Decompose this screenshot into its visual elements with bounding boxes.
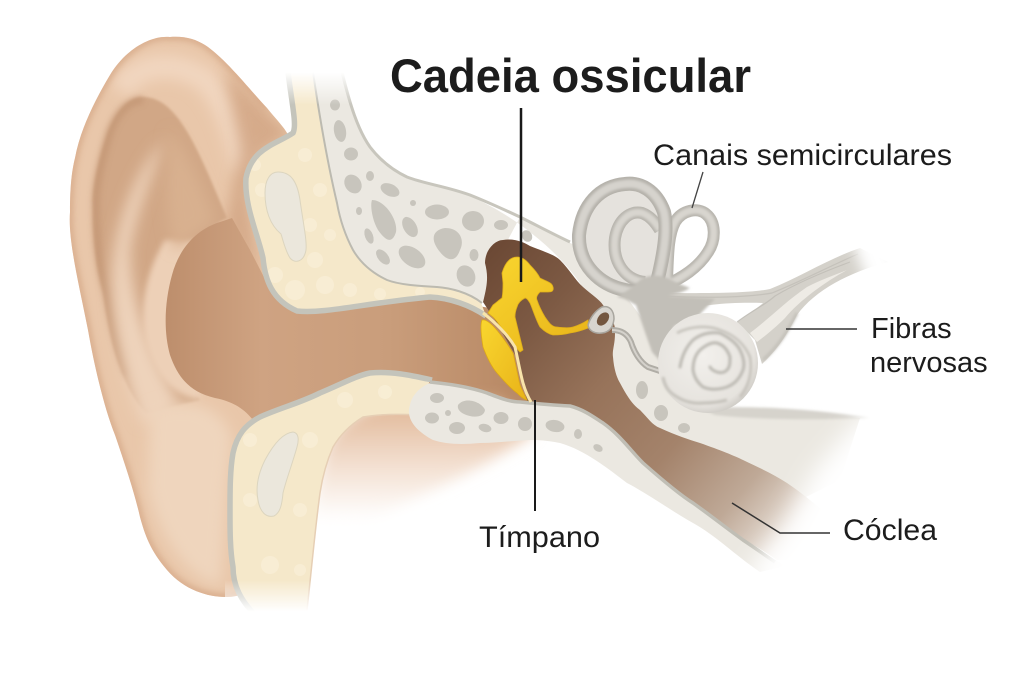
concha and ear canal: [166, 218, 535, 420]
soft ear edge: [70, 37, 267, 597]
lower temporal bone: [409, 382, 785, 572]
malleus and incus: [488, 257, 588, 352]
fade overlays: [270, 55, 360, 105]
antihelix ridge: [112, 140, 177, 423]
cochlea: [658, 313, 758, 413]
cartilage pocket: [265, 172, 306, 261]
upper cartilage: [246, 72, 486, 316]
label line: semicircular canals: [692, 172, 703, 208]
stapes: [588, 307, 660, 371]
nerve fibres: [663, 248, 888, 364]
outer ear (auricle): [70, 36, 288, 597]
groove dark edge: [96, 100, 143, 375]
middle ear cavity: [483, 240, 827, 560]
bone cavities: [330, 100, 690, 433]
tympanic membrane and malleus handle: [481, 320, 527, 400]
label: nerve fibres: nervosas: [870, 347, 988, 379]
semicircular canals: [579, 184, 714, 295]
upper temporal bone: [313, 72, 860, 500]
thin canal ridge in bone: [590, 250, 612, 277]
label: cochlea: Cóclea: [843, 514, 938, 547]
ear anatomy infographic: [70, 36, 987, 608]
label line: nerve fibres: [786, 328, 857, 330]
ossicular chain: [481, 257, 588, 402]
bone shadow below cochlea: [700, 407, 870, 419]
vestibule: [617, 276, 715, 362]
scaphoid groove: [93, 97, 227, 413]
label line: ossicular chain: [520, 108, 522, 282]
label line: eardrum: [534, 400, 536, 511]
helix ridge highlight: [120, 67, 245, 170]
soft shading under the canal: [304, 400, 535, 600]
lower cartilage: [230, 372, 432, 617]
inner ear labyrinth: [579, 184, 888, 419]
title: Cadeia ossicular: [390, 49, 751, 102]
label: semicircular canals: Canais semicirculares: [653, 139, 952, 172]
label line: cochlea: [732, 503, 830, 533]
canal interior: [579, 184, 666, 295]
label: nerve fibres: Fibras: [871, 313, 952, 345]
earlobe highlight: [148, 403, 232, 585]
bone cavities: [425, 393, 604, 454]
label: eardrum: Tímpano: [479, 521, 600, 554]
right shade of helix: [222, 76, 287, 274]
cartilage pocket: [257, 432, 298, 516]
